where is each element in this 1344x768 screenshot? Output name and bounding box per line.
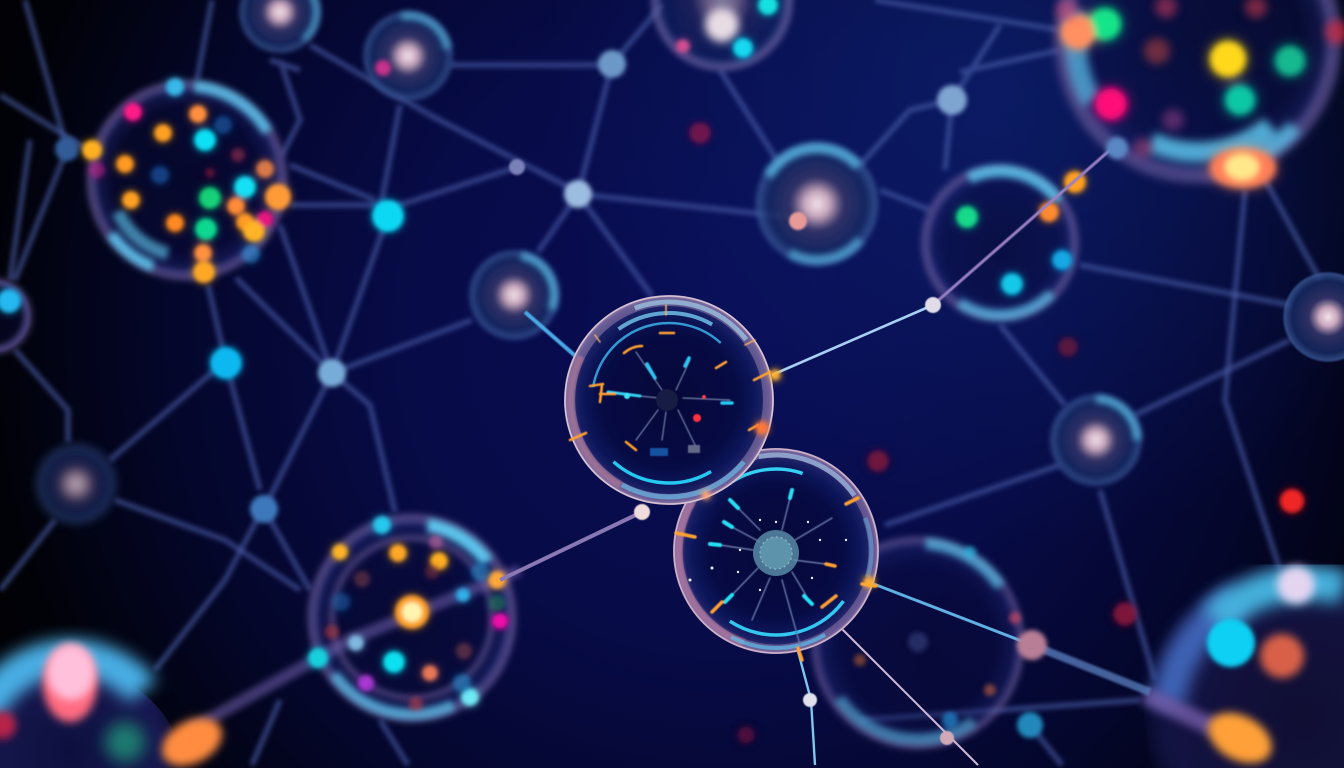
bright network lines [500,150,1150,765]
bubble: right small [1049,393,1143,487]
spokes [570,305,770,450]
bubble: upper middle [738,125,896,283]
coloured dots [83,79,290,282]
bubble: right edge small [1282,271,1344,363]
purple beam through bubble [190,570,520,730]
connector tip glints [702,370,874,587]
bubble: lower left with bright centre [190,490,540,746]
bubble: left edge small [0,278,32,354]
spokes [676,490,876,660]
hub [753,530,799,576]
bubble: lower right dim [784,509,1052,768]
network nodes [55,50,1128,745]
sparkles [688,519,847,591]
coloured dots, top right [1062,9,1304,187]
dim dots [90,117,259,262]
bubble: left dim small [35,443,117,525]
bubble: top small left [231,0,329,61]
bubble: top centre [650,0,794,72]
bubble: small left of centre [468,249,560,341]
bubble: top small centre-left [362,10,454,102]
glass bubble: centre lower [643,418,909,684]
hub [656,389,678,411]
bubble: top left, many coloured dots [66,59,308,301]
bubble: upper right [898,141,1102,345]
background glow top right [500,0,1344,600]
glass bubble: centre upper [532,263,806,537]
distant glow dots [690,123,1303,743]
bubble: bottom right blurred [1144,560,1344,768]
small red and cyan lights [624,393,706,456]
bubble: top right large [1014,0,1344,224]
bubble: bottom left blurred [0,644,230,768]
